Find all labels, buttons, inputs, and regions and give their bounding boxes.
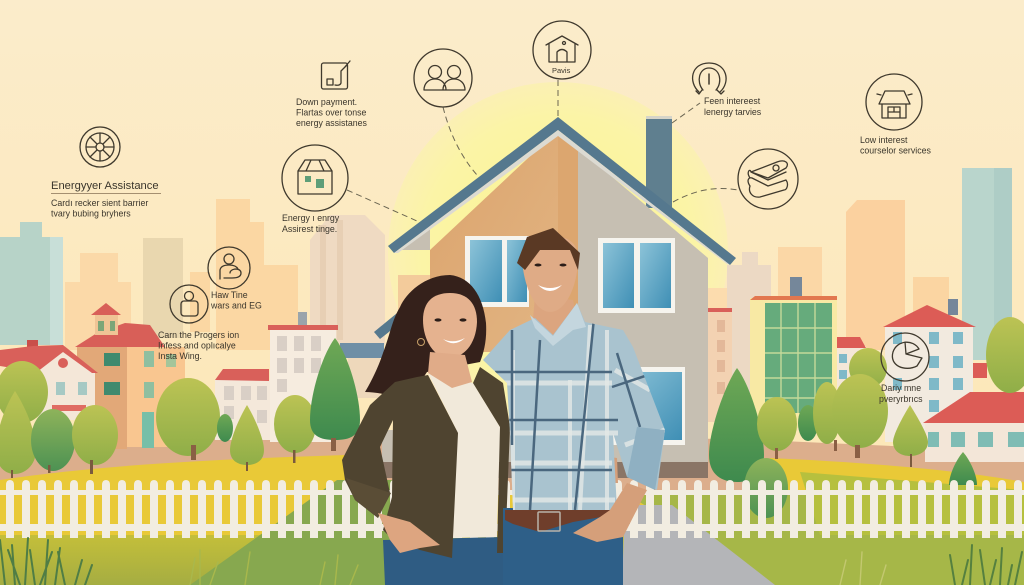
text: Low interest xyxy=(860,135,908,145)
jeans xyxy=(503,508,623,585)
forearm and hand xyxy=(573,483,647,542)
hand xyxy=(378,513,440,553)
label: wars and EG xyxy=(210,300,262,310)
heading: Energyyer Assistance xyxy=(51,180,159,192)
icon: house xyxy=(533,21,591,79)
gauge block xyxy=(693,63,762,117)
text: Dariy mne xyxy=(881,383,921,393)
icon: person lower xyxy=(170,285,208,323)
sun glow xyxy=(388,82,728,422)
red-roofed house xyxy=(0,340,98,420)
chimney xyxy=(646,116,672,208)
body text: Insta Wing. xyxy=(158,351,202,361)
icon: gauge xyxy=(693,63,726,94)
lower roof xyxy=(374,309,404,339)
eyes and smile xyxy=(534,264,566,291)
belt xyxy=(505,510,612,532)
down payment block xyxy=(296,61,368,128)
left neighbourhood buildings xyxy=(0,303,384,449)
label: Pavis xyxy=(552,66,571,75)
jeans xyxy=(383,537,503,585)
white buildings xyxy=(215,312,384,442)
red house right xyxy=(923,392,1024,462)
neck xyxy=(428,352,472,388)
text: courselor services xyxy=(860,146,931,156)
icon: stacked layers circle xyxy=(738,149,798,209)
text: Down payment. xyxy=(296,97,357,107)
sleeve cuff xyxy=(627,427,665,490)
hair xyxy=(517,228,580,270)
icon: pie clock xyxy=(881,333,929,381)
label: Haw Tine xyxy=(211,290,248,300)
grass tufts xyxy=(0,538,1022,585)
house xyxy=(374,116,736,478)
icon: document with pencil xyxy=(322,61,350,89)
neck xyxy=(533,295,577,338)
city skyline left xyxy=(0,199,430,350)
window lower xyxy=(612,367,685,445)
icon: house circle xyxy=(866,74,922,130)
green glass building xyxy=(750,277,837,428)
head xyxy=(522,236,578,312)
roof xyxy=(388,117,736,265)
face xyxy=(423,293,477,358)
peach building xyxy=(708,308,732,422)
window right xyxy=(598,238,675,313)
city skyline right xyxy=(708,168,1012,420)
icon: wheel xyxy=(80,127,120,167)
left trees xyxy=(0,338,360,478)
left cuff xyxy=(346,478,391,518)
clock block xyxy=(879,333,929,404)
eyes and smile xyxy=(434,318,466,343)
ground xyxy=(0,430,1024,585)
house circle with label xyxy=(533,21,591,79)
low interest block xyxy=(860,74,931,156)
text: Assirest tinge. xyxy=(282,224,337,234)
dashed connector lines xyxy=(347,80,738,221)
top xyxy=(428,373,500,538)
energy assistance block xyxy=(51,127,161,218)
text: Feen intereest xyxy=(704,96,761,106)
body text: Infess and oplıcalye xyxy=(158,340,236,350)
text: energy assistanes xyxy=(296,118,368,128)
hand behind woman xyxy=(610,457,618,483)
right trees xyxy=(709,317,1024,518)
icon: person upper xyxy=(208,247,250,289)
shirt xyxy=(483,303,665,510)
icon: two people circle xyxy=(414,49,472,107)
body text: Cardı recker sient barrier xyxy=(51,198,148,208)
hair xyxy=(365,275,486,402)
man xyxy=(470,228,670,585)
person icons block xyxy=(158,247,262,361)
small red building xyxy=(837,337,866,396)
body text: Carn the Progers ion xyxy=(158,330,239,340)
right neighbourhood buildings xyxy=(708,277,1024,462)
collar xyxy=(530,303,586,346)
text: lenergy tarvies xyxy=(704,107,762,117)
box energy block xyxy=(282,145,348,234)
text: Flartas over tonse xyxy=(296,108,367,118)
house walls xyxy=(430,130,558,352)
brick building xyxy=(75,303,185,449)
text: pveryrbrıcs xyxy=(879,394,923,404)
woman xyxy=(342,275,510,585)
window left xyxy=(465,236,529,307)
jacket xyxy=(342,367,510,558)
icon: box circle xyxy=(282,145,348,211)
text: Energy ı enrgy xyxy=(282,213,340,223)
white tower xyxy=(883,299,976,442)
earring xyxy=(418,338,424,346)
body text: tvary bubing bryhers xyxy=(51,208,131,218)
picket fence xyxy=(0,480,1024,538)
